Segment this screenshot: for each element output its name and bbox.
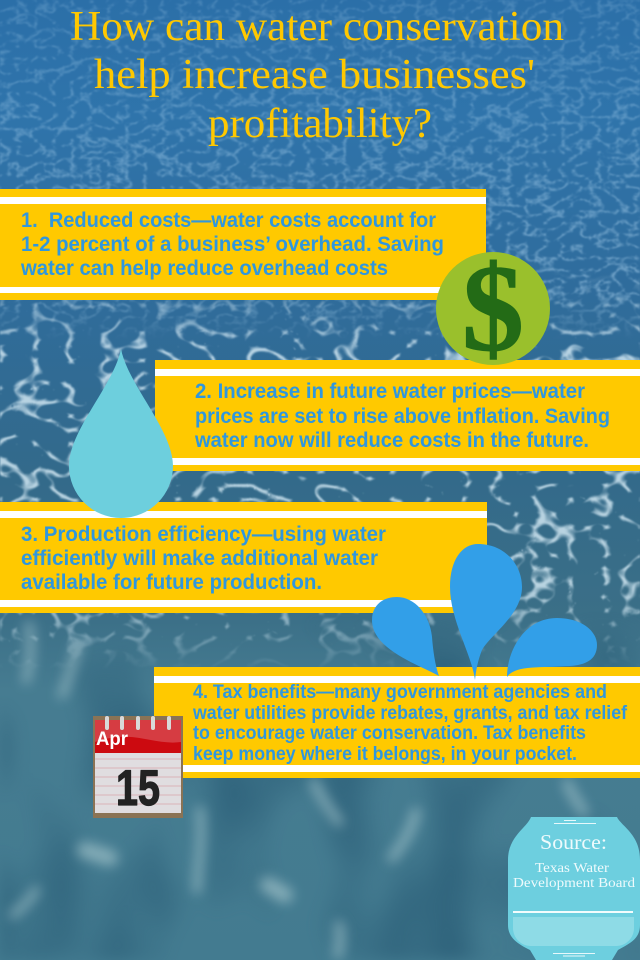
title: profitability?	[208, 101, 432, 147]
panel: future water prices: water now will reduce costs in the future.	[194, 429, 589, 452]
source badge	[508, 817, 640, 960]
title: How can water conservation	[70, 4, 564, 50]
panel: reduced costs	[0, 189, 486, 300]
source badge: Source:	[540, 830, 607, 854]
panel: future water prices: 2. Increase in future water prices—water	[195, 380, 585, 403]
icon: dollar coin: $	[462, 240, 524, 377]
title	[70, 4, 564, 147]
panel: tax benefits	[154, 667, 640, 778]
icon: calendar April 15	[93, 716, 183, 818]
panel: reduced costs: water can help reduce overhead costs	[20, 257, 388, 280]
panel: tax benefits: 4. Tax benefits—many government agencies and	[193, 682, 607, 703]
panel: future water prices: prices are set to rise above inflation. Saving	[195, 405, 610, 428]
source badge: Development Board	[513, 876, 635, 891]
icon: calendar April 15: 15	[116, 760, 160, 816]
icon: dollar coin	[436, 240, 550, 377]
panel: tax benefits: to encourage water conservation. Tax benefits	[193, 723, 586, 744]
panel: tax benefits: keep money where it belongs, in your pocket.	[193, 744, 577, 765]
panel: production efficiency: efficiently will make additional water	[21, 547, 378, 570]
panel: production efficiency	[0, 502, 487, 613]
panel: production efficiency: available for future production.	[21, 571, 322, 594]
icon: water splash	[372, 544, 597, 680]
source badge: Texas Water	[535, 861, 609, 876]
title: help increase businesses'	[94, 52, 535, 98]
panel: reduced costs: 1-2 percent of a business’ overhead. Saving	[21, 233, 444, 256]
panel: reduced costs: 1. Reduced costs—water costs account for	[21, 209, 436, 232]
icon: calendar April 15: Apr	[96, 729, 129, 750]
panel: production efficiency: 3. Production efficiency—using water	[21, 523, 386, 546]
panel: future water prices	[155, 360, 640, 471]
icon: water drop	[69, 349, 173, 518]
